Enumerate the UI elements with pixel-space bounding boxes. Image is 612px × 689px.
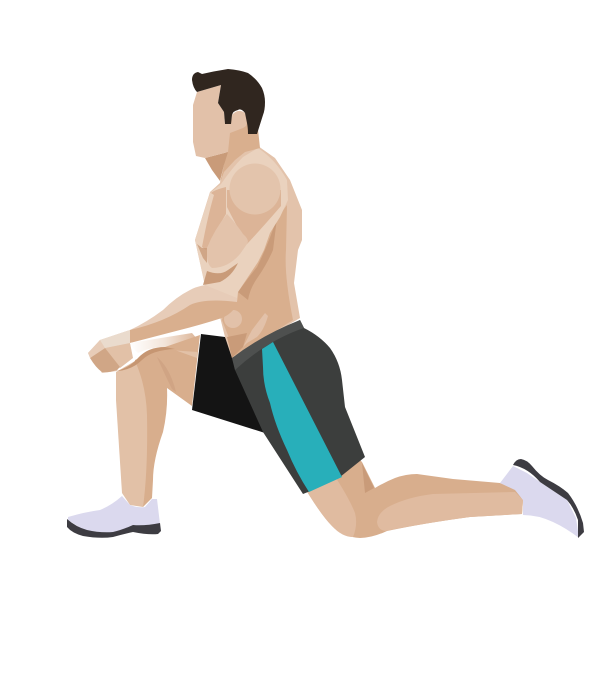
rear shoe xyxy=(500,459,584,538)
back xyxy=(195,146,302,358)
dark back stripe xyxy=(238,218,277,300)
deltoid xyxy=(230,164,280,214)
shorts xyxy=(232,320,365,494)
rear leg xyxy=(300,450,523,538)
head xyxy=(192,69,265,183)
under-pec crescent xyxy=(203,263,238,285)
shoulder light xyxy=(195,148,288,302)
face xyxy=(193,85,247,158)
hair xyxy=(192,69,265,134)
flank xyxy=(222,205,293,356)
arm xyxy=(88,285,237,373)
jaw shadow xyxy=(205,152,228,181)
neck xyxy=(220,120,260,183)
torso xyxy=(195,146,302,358)
front shoe xyxy=(67,496,161,538)
chest shade xyxy=(202,187,226,250)
waistband xyxy=(232,320,304,370)
front leg xyxy=(116,345,198,507)
teal stripe xyxy=(262,342,342,492)
black inner shorts xyxy=(192,334,265,433)
under deltoid shade xyxy=(227,190,281,244)
pectoral xyxy=(207,214,248,268)
